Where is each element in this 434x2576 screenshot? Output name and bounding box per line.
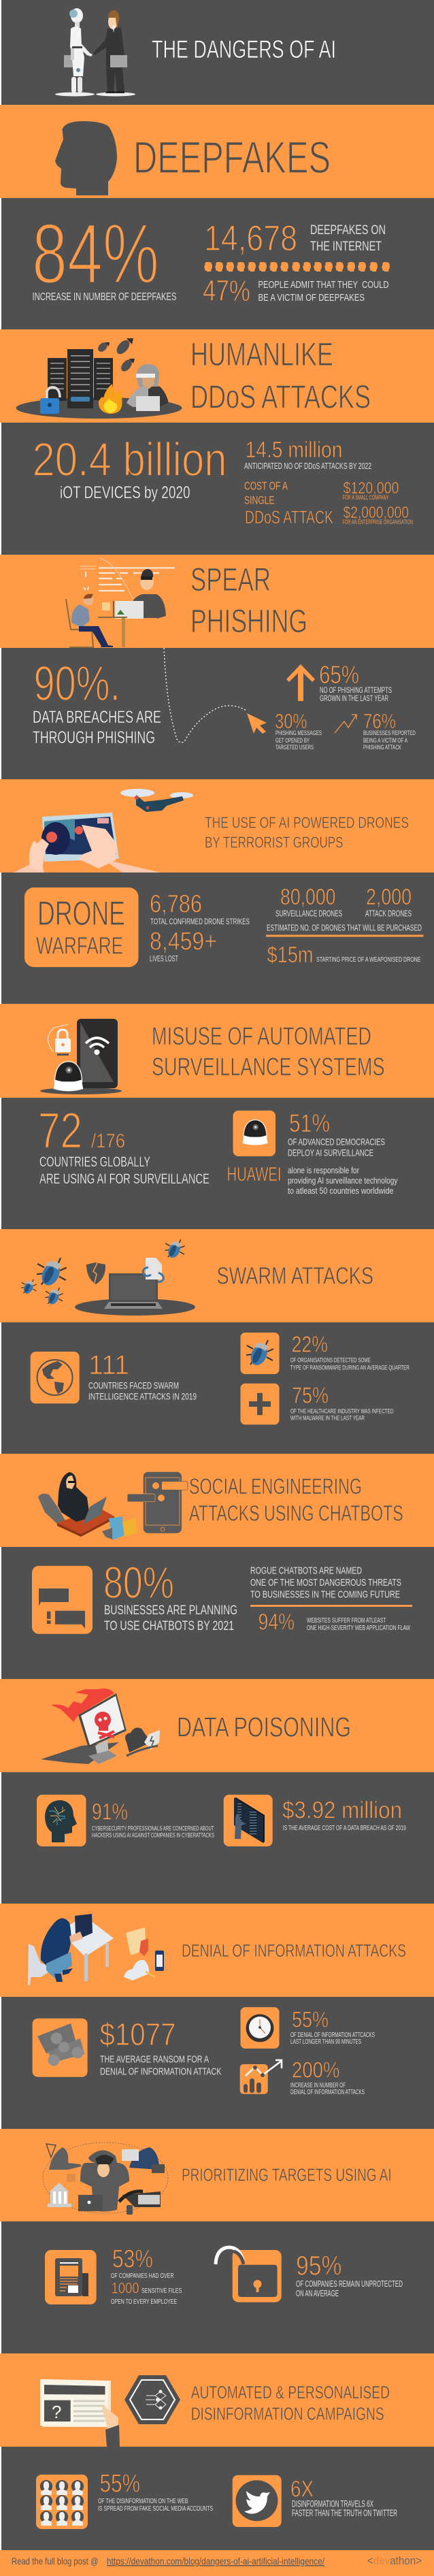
stat: 20.4 billion: iOT DEVICES by 2020	[60, 483, 190, 502]
stat: 22%: OF ORGANISATIONS DETECTED SOME	[290, 1356, 371, 1364]
icon: up arrow	[286, 664, 315, 701]
stat: 51%: 51%	[289, 1109, 330, 1137]
stat: huawei: providing AI surveillance technology	[288, 1175, 398, 1186]
stat: drones purchased: 80,000	[280, 884, 336, 909]
panel: title	[55, 8, 336, 97]
stat: 47%: PEOPLE ADMIT THAT THEY COULD	[258, 279, 389, 291]
icon: burning monitor with skull	[41, 1689, 160, 1764]
icon: phone, lock and camera	[40, 1019, 122, 1094]
icon: camera box	[233, 1111, 276, 1156]
stat: huawei	[227, 1164, 398, 1196]
stat: 76%	[363, 709, 416, 751]
heading: PHISHING	[190, 604, 307, 640]
stat: 111: 111	[88, 1350, 129, 1380]
stat: cost of a ddos attack: COST OF A	[244, 479, 288, 493]
stat: 55% of attacks: 55%	[292, 2007, 329, 2032]
stat: $15m	[267, 942, 421, 967]
panel: drones header	[14, 789, 409, 873]
icon: brain head box	[37, 1795, 86, 1846]
stat: 91%: HACKERS USING AI AGAINST COMPANIES IN CYBERATTACKS	[92, 1831, 214, 1839]
stat: 47%: BE A VICTIM OF DEEPFAKES	[258, 292, 365, 304]
icon: neural network hexagon	[124, 2375, 180, 2424]
stat: 91%: 91%	[92, 1799, 128, 1825]
icon: hooded hacker at desk with files	[28, 1914, 164, 1985]
stat: 14,678: THE INTERNET	[310, 240, 382, 254]
heading: HUMANLIKE	[190, 337, 333, 373]
callout: drone warfare box	[24, 887, 139, 967]
stat: 14,678: DEEPFAKES ON	[310, 223, 386, 238]
icon: bug box	[241, 1333, 279, 1374]
icon: money box	[33, 2019, 88, 2077]
stat: 76%: 76%	[363, 709, 396, 733]
panel: ddos stats	[33, 433, 413, 527]
panel: spear phishing header	[66, 558, 307, 647]
icon: drone	[120, 789, 193, 812]
stat: 84%: INCREASE IN NUMBER OF DEEPFAKES	[33, 291, 177, 303]
panel: swarm stats	[31, 1332, 410, 1424]
stat: 90%: 90%.	[34, 657, 120, 711]
stat: 14,678: 14,678	[204, 218, 297, 259]
panel: disinformation header	[40, 2375, 390, 2447]
stat: 65%: 65%	[319, 661, 359, 689]
heading	[190, 337, 371, 415]
icon: robot and businessman shaking hands	[55, 8, 135, 97]
stat: 6x	[290, 2476, 397, 2518]
stat: cost of a ddos attack: FOR A SMALL COMPANY	[343, 494, 389, 501]
stat: cost of a ddos attack: SINGLE	[244, 494, 275, 506]
stat: $1077: DENIAL OF INFORMATION ATTACK	[100, 2066, 222, 2077]
stat: drones purchased	[267, 884, 422, 933]
text: rogue chatbots	[250, 1565, 401, 1600]
stat: 200%	[290, 2058, 365, 2096]
panel: prioritizing targets stats	[45, 2245, 403, 2306]
stat: 80%	[103, 1557, 237, 1633]
stat: 65%: NO OF PHISHING ATTEMPTS	[320, 685, 392, 695]
heading	[190, 562, 307, 640]
stat: 200%: INCREASE IN NUMBER OF	[290, 2082, 346, 2089]
text: read the full blog post: Read the full blog post @	[12, 2556, 98, 2566]
icon: plus box	[241, 1384, 279, 1424]
link: blog url: https://devathon.com/blog/dangers-of-ai-artificial-intelligence/	[107, 2556, 324, 2566]
stat: 90%	[33, 657, 161, 747]
stat: cost of a ddos attack	[244, 479, 413, 527]
stat: 55% disinformation: 55%	[99, 2470, 140, 2498]
panel: disinformation stats	[36, 2470, 397, 2529]
stat: 95%: ON AN AVERAGE	[296, 2288, 339, 2298]
stat: 91%: CYBERSECURITY PROFESSIONALS ARE CONCERNED ABOUT	[92, 1825, 214, 1832]
icon: newspaper held by hand: ?	[52, 2402, 61, 2422]
panel: footer	[12, 2554, 422, 2567]
stat: 84%: 84%	[32, 207, 159, 301]
icon: bugs attacking laptop	[21, 1239, 195, 1316]
stat: 6,786 strikes	[150, 890, 250, 926]
stat: 55% of attacks: LAST LONGER THAN 90 MINUTES	[290, 2038, 361, 2046]
stat: 75%: WITH MALWARE IN THE LAST YEAR	[290, 1414, 365, 1422]
stat: 30%: 30%	[275, 709, 307, 733]
stat: 65%: GROWN IN THE LAST YEAR	[320, 694, 388, 703]
panel: denial of information header	[28, 1914, 406, 1985]
icon: fake accounts box	[36, 2475, 88, 2529]
stat: drones purchased: 2,000	[366, 884, 412, 909]
stat: 72/176: /176	[91, 1130, 125, 1152]
icon: cursor arrow	[247, 713, 267, 734]
icon: chat bubbles box	[32, 1566, 93, 1634]
stat: $15m: $15m	[267, 942, 313, 967]
panel: drone stats	[24, 884, 423, 967]
stat: 72/176: COUNTRIES GLOBALLY	[39, 1154, 150, 1170]
stat: 53%: 1000	[112, 2279, 139, 2296]
heading: DATA POISONING	[177, 1712, 351, 1743]
icon: newspaper held by hand	[40, 2379, 120, 2447]
icon: rising line chart	[335, 715, 356, 733]
icon: servers, hacker and flames	[16, 338, 182, 419]
icon: head silhouette	[55, 121, 117, 195]
panel: spear phishing stats	[33, 648, 416, 751]
panel: surveillance header	[40, 1019, 385, 1094]
stat: 14.5 million: ANTICIPATED NO OF DDoS ATTACKS BY 2022	[244, 461, 371, 471]
stat: 47%: 47%	[203, 274, 250, 308]
stat: cost of a ddos attack: $120,000	[343, 479, 399, 498]
heading: SWARM ATTACKS	[216, 1263, 373, 1290]
stat: drones purchased: SURVEILLANCE DRONES	[276, 909, 342, 919]
stat: 53%	[111, 2245, 182, 2306]
icon: hacker at laptop with phone chat	[38, 1472, 188, 1540]
stat: 75%	[290, 1383, 394, 1422]
icon: globe box	[31, 1352, 80, 1403]
dotted fishing line	[164, 648, 246, 743]
stat: 55% of attacks	[290, 2007, 375, 2046]
stat: cost of a ddos attack: $2,000,000	[343, 504, 409, 522]
stat: 55% of attacks: OF DENIAL OF INFORMATION ATTCACKS	[290, 2032, 375, 2039]
panel: prioritizing targets header	[43, 2142, 392, 2215]
stat: 22%	[290, 1332, 410, 1371]
stat: 53%: 53%	[112, 2245, 153, 2273]
stat: 75%: 75%	[292, 1383, 329, 1408]
stat: 14,678	[204, 218, 386, 259]
stat: 95%: 95%	[296, 2251, 341, 2281]
stat: 55% disinformation: OF THE DISINFORMATION ON THE WEB	[98, 2498, 188, 2505]
heading: THE DANGERS OF AI	[152, 35, 336, 63]
stat: 72/176: ARE USING AI FOR SURVEILLANCE	[39, 1171, 210, 1187]
stat: 6,786 strikes: TOTAL CONFIRMED DRONE STRIKES	[150, 917, 250, 926]
panel: ddos header	[16, 337, 371, 419]
stat: 200%: DENIAL OF INFORMATION ATTACKS	[290, 2089, 365, 2096]
stat: 30%	[275, 709, 322, 751]
stat: 6x: DISINFORMATION TRAVELS 6X	[292, 2499, 373, 2509]
stat: 20.4 billion: 20.4 billion	[33, 433, 227, 486]
stat: 14.5 million	[244, 437, 371, 471]
stat: 30%: GET OPENED BY	[276, 737, 310, 744]
icon: hands holding tablet	[14, 813, 161, 873]
panel: denial of information stats	[33, 2007, 375, 2096]
stat: 14.5 million: 14.5 million	[245, 437, 343, 462]
icon: document box	[45, 2250, 97, 2304]
stat: 20.4 billion	[33, 433, 227, 502]
panel: deepfakes stats	[32, 207, 390, 308]
heading: BY TERRORIST GROUPS	[205, 834, 343, 851]
stat: $3.92 million: $3.92 million	[282, 1797, 402, 1824]
stat: 95%	[296, 2251, 403, 2298]
stat: 8,459 lives: 8,459+	[150, 928, 217, 956]
stat: 76%: BEING A VICTIM OF A	[363, 737, 407, 744]
callout: drone warfare box: WARFARE	[36, 933, 123, 960]
panel: swarm header	[21, 1239, 373, 1316]
stat: 55% disinformation	[98, 2470, 213, 2513]
heading	[205, 814, 409, 851]
stat: $1077: THE AVERAGE RANSOM FOR A	[100, 2053, 209, 2065]
stat: 111: COUNTRIES FACED SWARM	[88, 1380, 179, 1391]
icon: open padlock box	[216, 2247, 282, 2302]
stat: 90%: DATA BREACHES ARE	[33, 708, 161, 727]
stat: 8,459 lives	[150, 928, 217, 964]
stat: huawei: HUAWEI	[227, 1164, 282, 1186]
callout: drone warfare box: DRONE	[37, 894, 125, 932]
panel: surveillance stats	[38, 1103, 398, 1196]
stat: 90%: THROUGH PHISHING	[33, 728, 155, 747]
stat: 6,786 strikes: 6,786	[150, 890, 202, 918]
icon: twitter box	[233, 2475, 282, 2527]
stat: 22%: 22%	[291, 1332, 328, 1357]
stat: 53%: OF COMPANIES HAD OVER	[111, 2272, 174, 2280]
icon: growth chart box	[240, 2060, 282, 2094]
heading: SPEAR	[190, 562, 271, 598]
stat: 53%: SENSITIVE FILES	[141, 2287, 182, 2295]
stat: cost of a ddos attack: DDoS ATTACK	[245, 507, 333, 527]
text: rogue chatbots: ROGUE CHATBOTS ARE NAMED	[250, 1565, 362, 1576]
icon: clock box	[241, 2007, 279, 2049]
heading	[191, 2383, 390, 2424]
heading	[152, 1022, 385, 1081]
stat: 51%	[288, 1109, 385, 1158]
stat: 94%	[258, 1609, 410, 1635]
stat: 94%: 94%	[258, 1609, 295, 1635]
stat: 72/176	[38, 1103, 210, 1187]
stat: 51%: OF ADVANCED DEMOCRACIES	[288, 1136, 385, 1147]
row of head icons	[204, 262, 390, 272]
heading: DEEPFAKES	[133, 132, 331, 182]
panel: social engineering header	[38, 1472, 403, 1540]
stat: 72/176: 72	[38, 1103, 82, 1159]
heading: DDoS ATTACKS	[190, 380, 371, 415]
stat: 76%: PHISHING ATTACK	[363, 744, 401, 751]
panel: chatbots stats	[32, 1557, 412, 1635]
stat: 6x: 6X	[290, 2476, 314, 2502]
stat: 30%: PHISHING MESSAGES	[276, 730, 322, 736]
stat: 30%: TARGETED USERS	[276, 744, 314, 751]
stat: 111: INTELLIGENCE ATTACKS IN 2019	[88, 1391, 197, 1402]
stat: 94%: WEBSITES SUFFER FROM ATLEAST	[307, 1617, 386, 1625]
stat: 80%: 80%	[103, 1557, 174, 1608]
stat: $1077	[99, 2017, 222, 2077]
icon: hacker phishing a worker at a desk	[66, 558, 175, 647]
logo: devathon: <devathon>	[367, 2554, 422, 2567]
stat: 80%: TO USE CHATBOTS BY 2021	[104, 1619, 234, 1633]
icon: stressed man surrounded by threats	[43, 2142, 168, 2215]
stat: 55% disinformation: IS SPREAD FROM FAKE SOCIAL MEDIA ACCOUNTS	[98, 2505, 213, 2513]
stat: huawei: alone is responsible for	[288, 1165, 360, 1175]
stat: 200%: 200%	[292, 2058, 340, 2083]
heading	[189, 1474, 403, 1525]
stat: 8,459 lives: LIVES LOST	[150, 954, 178, 964]
stat: 47%	[203, 274, 389, 308]
stat: 80%: BUSINESSES ARE PLANNING	[104, 1603, 237, 1618]
stat: 53%: OPEN TO EVERY EMPLOYEE	[111, 2298, 177, 2306]
stat: $1077: $1077	[99, 2017, 176, 2052]
stat: 65%	[319, 661, 392, 703]
stat: 91%	[92, 1799, 214, 1839]
stat: 51%: DEPLOY AI SURVEILLANCE	[288, 1147, 373, 1158]
stat: 111	[88, 1350, 197, 1402]
panel: data poisoning stats	[37, 1795, 406, 1846]
icon: server box	[224, 1795, 273, 1846]
panel: data poisoning header	[41, 1689, 351, 1764]
panel: deepfakes header	[55, 121, 331, 195]
heading: SOCIAL ENGINEERING	[189, 1474, 362, 1499]
stat: huawei: to atleast 50 countries worldwide	[288, 1186, 393, 1196]
